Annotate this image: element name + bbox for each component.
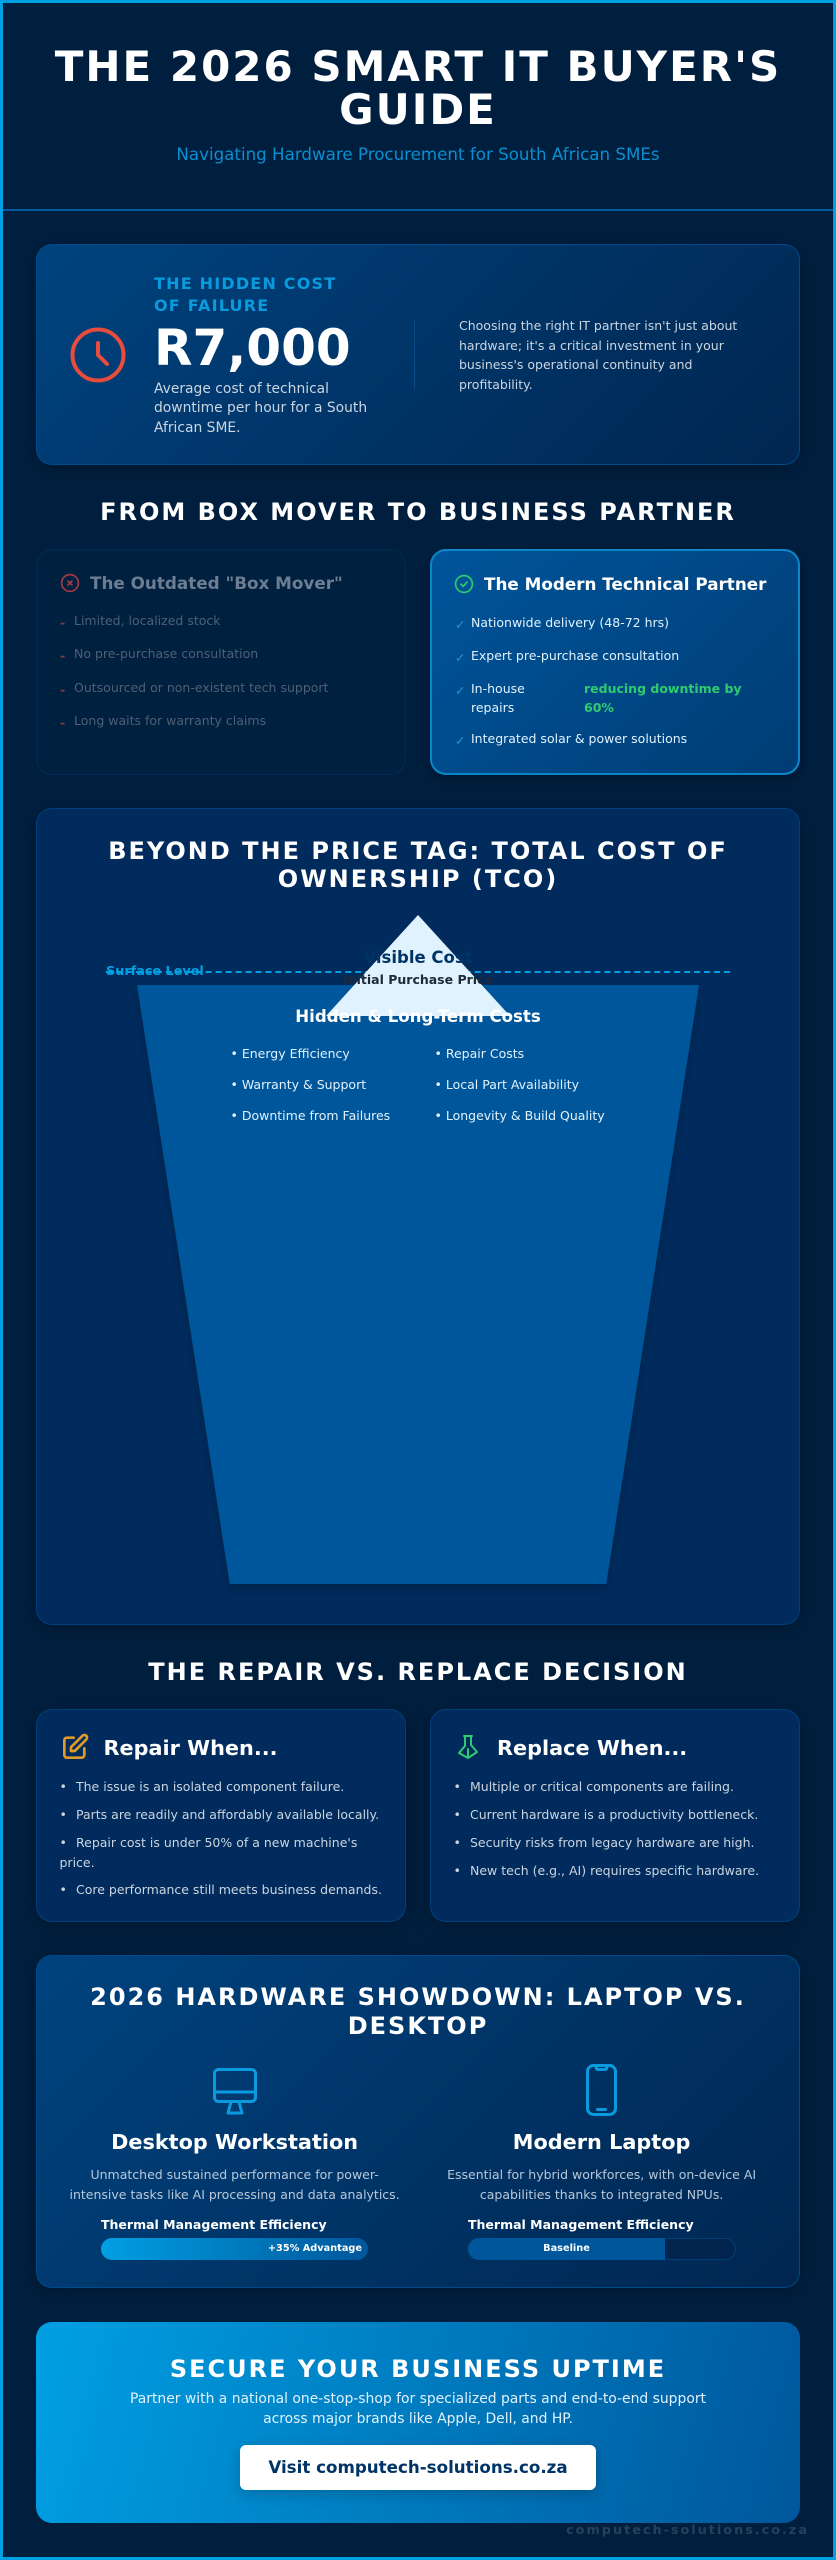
progress bar: desktop: +35% Advantage bbox=[268, 2243, 362, 2254]
CTA button bbox=[240, 2445, 596, 2490]
card title: The Outdated "Box Mover" bbox=[90, 573, 343, 593]
list: box mover drawbacks: - bbox=[60, 715, 65, 730]
intro text: hardware; it's a critical investment in your bbox=[459, 338, 724, 352]
heading: TCO: BEYOND THE PRICE TAG: TOTAL COST OF bbox=[108, 837, 728, 865]
list: box mover drawbacks: - bbox=[60, 648, 65, 663]
icon: check circle bbox=[454, 574, 474, 594]
list: replace conditions: Multiple or critical components are failing. bbox=[470, 1778, 734, 1794]
list: box mover drawbacks: Outsourced or non-existent tech support bbox=[74, 680, 328, 695]
panel: total cost of ownership bbox=[36, 808, 800, 1625]
icon: clock bbox=[70, 328, 126, 382]
intro text: profitability. bbox=[459, 376, 533, 392]
list: partner benefits: reducing downtime by bbox=[584, 680, 742, 696]
CTA text: Partner with a national one-stop-shop for specialized parts and end-to-end support bbox=[130, 2391, 706, 2407]
list: replace conditions: • bbox=[454, 1806, 461, 1822]
iceberg: visible tip bbox=[326, 915, 510, 1016]
list: replace conditions: Current hardware is a productivity bottleneck. bbox=[470, 1806, 758, 1822]
CTA text bbox=[130, 2391, 706, 2427]
column: desktop description: Unmatched sustained performance for power- bbox=[90, 2167, 379, 2182]
list: box mover drawbacks: - bbox=[60, 615, 65, 630]
list: repair conditions: Core performance still meets business demands. bbox=[76, 1882, 382, 1896]
list: repair conditions: • bbox=[60, 1806, 67, 1822]
column: laptop description bbox=[447, 2167, 756, 2202]
hidden costs list: • Repair Costs bbox=[434, 1046, 524, 1061]
icon: pen nib bbox=[458, 1735, 478, 1759]
icon: desktop bbox=[213, 2068, 257, 2114]
heading: box mover to partner: FROM BOX MOVER TO BUSINESS PARTNER bbox=[100, 498, 736, 526]
CTA button: Visit computech-solutions.co.za bbox=[268, 2457, 568, 2477]
column: laptop title: Modern Laptop bbox=[513, 2130, 690, 2154]
panel: replace when bbox=[430, 1709, 800, 1922]
thermal label: desktop: Thermal Management Efficiency bbox=[101, 2217, 327, 2232]
stat caption: downtime per hour for a South bbox=[154, 400, 367, 416]
list: box mover drawbacks bbox=[60, 613, 328, 730]
icon: pencil square bbox=[63, 1734, 88, 1759]
hidden costs list: • Longevity & Build Quality bbox=[434, 1108, 605, 1123]
list: replace conditions: Security risks from legacy hardware are high. bbox=[470, 1834, 754, 1850]
label: hidden cost bbox=[154, 274, 336, 315]
panel: outdated box mover bbox=[36, 549, 406, 775]
list: partner benefits: ✓ bbox=[455, 617, 465, 632]
progress bar: desktop bbox=[101, 2238, 368, 2260]
intro text bbox=[459, 318, 737, 392]
panel: modern technical partner bbox=[430, 549, 800, 775]
icon: phone bbox=[586, 2064, 617, 2116]
list: repair conditions: Parts are readily and affordably available locally. bbox=[76, 1806, 379, 1822]
label: hidden cost: OF FAILURE bbox=[154, 296, 269, 315]
stat caption bbox=[154, 380, 367, 436]
list: repair conditions: price. bbox=[60, 1854, 95, 1870]
initial purchase price text: Initial Purchase Price bbox=[343, 972, 493, 987]
column: desktop description: intensive tasks like AI processing and data analytics. bbox=[70, 2186, 400, 2202]
list: replace conditions: • bbox=[454, 1778, 461, 1794]
subtitle: Navigating Hardware Procurement for South African SMEs bbox=[176, 144, 660, 164]
panel: call to action bbox=[36, 2322, 800, 2523]
visible cost text: Visible Cost bbox=[363, 948, 473, 967]
hidden costs list: • Warranty & Support bbox=[230, 1077, 366, 1092]
list: repair conditions bbox=[60, 1778, 382, 1896]
label: hidden cost: THE HIDDEN COST bbox=[154, 274, 336, 293]
list: replace conditions: • bbox=[454, 1834, 461, 1850]
hidden costs heading: Hidden & Long-Term Costs bbox=[295, 1007, 541, 1026]
surface level line bbox=[106, 971, 730, 973]
thermal label: laptop: Thermal Management Efficiency bbox=[468, 2217, 694, 2232]
CTA heading: SECURE YOUR BUSINESS UPTIME bbox=[170, 2355, 666, 2383]
list: box mover drawbacks: No pre-purchase consultation bbox=[74, 646, 258, 661]
hidden costs list bbox=[230, 1046, 605, 1123]
list: repair conditions: Repair cost is under 50% of a new machine's bbox=[76, 1834, 357, 1850]
hidden costs list: • Energy Efficiency bbox=[230, 1046, 350, 1061]
iceberg: submerged trapezoid bbox=[137, 985, 699, 1589]
watermark: computech-solutions.co.za bbox=[566, 2523, 809, 2538]
list: partner benefits: Integrated solar & power solutions bbox=[471, 731, 687, 746]
stat: R7,000: R7,000 bbox=[154, 318, 351, 376]
card title: Repair When... bbox=[104, 1736, 278, 1760]
list: box mover drawbacks: Limited, localized stock bbox=[74, 613, 220, 628]
heading: showdown: 2026 HARDWARE SHOWDOWN: LAPTOP VS. bbox=[90, 1982, 746, 2010]
list: box mover drawbacks: Long waits for warranty claims bbox=[74, 713, 266, 728]
list: replace conditions: • bbox=[454, 1862, 461, 1878]
divider bbox=[414, 321, 415, 389]
list: partner benefits: ✓ bbox=[455, 733, 465, 748]
surface level label: Surface Level bbox=[106, 964, 204, 979]
column: laptop description: Essential for hybrid workforces, with on-device AI bbox=[447, 2167, 756, 2182]
icon: x circle bbox=[60, 574, 80, 592]
card title: The Modern Technical Partner bbox=[484, 574, 766, 594]
title: GUIDE bbox=[339, 85, 497, 134]
list: repair conditions: • bbox=[60, 1778, 67, 1794]
panel: hidden cost of failure bbox=[36, 244, 800, 465]
list: repair conditions: The issue is an isolated component failure. bbox=[76, 1778, 344, 1794]
heading: TCO: OWNERSHIP (TCO) bbox=[278, 865, 558, 893]
list: repair conditions: • bbox=[60, 1834, 67, 1850]
heading: showdown bbox=[90, 1982, 746, 2040]
stat caption: Average cost of technical bbox=[154, 380, 329, 396]
heading: showdown: DESKTOP bbox=[348, 2012, 488, 2040]
list: partner benefits: Expert pre-purchase consultation bbox=[471, 648, 679, 662]
list: partner benefits: In-house bbox=[471, 680, 525, 696]
heading: TCO bbox=[108, 837, 728, 893]
panel: hardware showdown bbox=[36, 1955, 800, 2288]
heading: repair vs replace: THE REPAIR VS. REPLACE DECISION bbox=[148, 1658, 688, 1686]
list: box mover drawbacks: - bbox=[60, 682, 65, 697]
list: partner benefits bbox=[455, 614, 742, 748]
column: laptop description: capabilities thanks to integrated NPUs. bbox=[480, 2186, 723, 2202]
title bbox=[54, 42, 781, 134]
CTA text: across major brands like Apple, Dell, and HP. bbox=[263, 2411, 573, 2427]
column: desktop description bbox=[70, 2167, 400, 2202]
title: THE 2026 SMART IT BUYER'S bbox=[55, 42, 781, 91]
list: replace conditions: New tech (e.g., AI) requires specific hardware. bbox=[470, 1862, 759, 1878]
list: partner benefits: 60% bbox=[584, 700, 614, 715]
stat caption: African SME. bbox=[154, 420, 241, 436]
list: partner benefits: ✓ bbox=[455, 650, 465, 665]
progress bar: laptop: Baseline bbox=[543, 2243, 590, 2254]
list: repair conditions: • bbox=[60, 1882, 67, 1896]
panel: repair when bbox=[36, 1709, 406, 1922]
header bbox=[0, 0, 836, 211]
card title: Replace When... bbox=[497, 1736, 687, 1760]
list: replace conditions bbox=[454, 1778, 759, 1878]
list: partner benefits: repairs bbox=[471, 700, 514, 715]
progress bar: laptop bbox=[468, 2238, 736, 2260]
hidden costs list: • Downtime from Failures bbox=[230, 1108, 390, 1123]
list: partner benefits: Nationwide delivery (48-72 hrs) bbox=[471, 614, 669, 630]
hidden costs list: • Local Part Availability bbox=[434, 1077, 579, 1092]
list: partner benefits: ✓ bbox=[455, 683, 465, 698]
intro text: business's operational continuity and bbox=[459, 357, 692, 372]
intro text: Choosing the right IT partner isn't just about bbox=[459, 318, 737, 333]
column: desktop workstation title: Desktop Workstation bbox=[111, 2130, 358, 2154]
